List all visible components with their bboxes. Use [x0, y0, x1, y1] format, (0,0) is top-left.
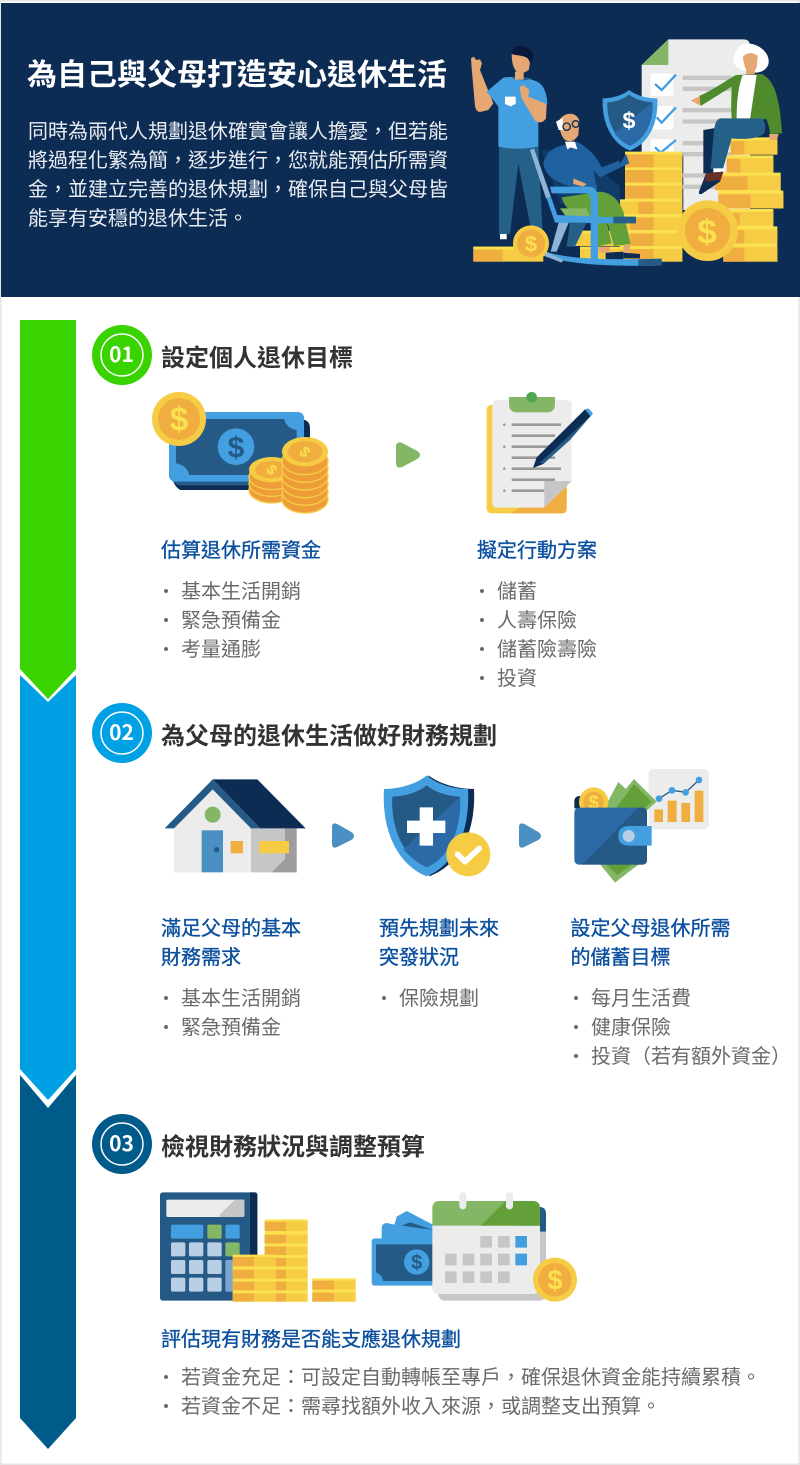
icon: calculator and coins: [160, 1192, 356, 1302]
panel: header: [1, 3, 800, 297]
woman sitting: [691, 43, 782, 194]
column: estimate funds: 基本生活開銷: [181, 575, 301, 604]
column: emergencies: [379, 912, 499, 1011]
block: evaluation: 評估現有財務是否能支應退休規劃: [161, 1323, 461, 1352]
heading: step 3: 檢視財務狀況與調整預算: [161, 1127, 425, 1162]
arrow bar: step 3: [20, 1075, 76, 1449]
column: basic needs: 財務需求: [161, 941, 241, 970]
column: basic needs: 滿足父母的基本: [161, 912, 301, 941]
icon: money and coins: $: [170, 402, 189, 439]
column: basic needs: 基本生活開銷: [181, 982, 301, 1011]
gold coins: $: [697, 213, 717, 251]
column: basic needs: [161, 912, 301, 1040]
shield with dollar: $: [623, 108, 636, 134]
number badge 01: 01: [109, 339, 134, 369]
column: savings goal: 設定父母退休所需: [570, 912, 730, 941]
number badge 02: 02: [109, 717, 134, 747]
number badge 02: [92, 703, 152, 763]
shield with dollar: [603, 90, 657, 151]
number badge 03: [92, 1114, 152, 1174]
arrow bar: step 1: [20, 320, 76, 699]
man standing: [471, 46, 547, 246]
block: evaluation: 若資金充足：可設定自動轉帳至專戶，確保退休資金能持續累積。: [181, 1361, 761, 1390]
column: savings goal: 的儲蓄目標: [570, 941, 670, 970]
heading: step 2: 為父母的退休生活做好財務規劃: [161, 716, 497, 751]
icon: cash, calendar and coin: [372, 1192, 577, 1302]
rocking chair and elderly man: [530, 114, 662, 266]
number badge 01: [92, 325, 152, 385]
icon: money and coins: $: [228, 432, 245, 465]
arrow: [397, 443, 419, 467]
column: savings goal: 投資（若有額外資金）: [591, 1040, 791, 1069]
title: 為自己與父母打造安心退休生活: [27, 50, 447, 94]
illustration: family with coins: [471, 39, 783, 266]
column: estimate funds: 緊急預備金: [181, 604, 281, 633]
document: [642, 39, 750, 210]
column: action plan: 儲蓄險壽險: [497, 633, 597, 662]
intro text: 同時為兩代人規劃退休確實會讓人擔憂，但若能: [28, 115, 448, 144]
icon: cash, calendar and coin: $: [547, 1264, 563, 1295]
column: action plan: 擬定行動方案: [477, 534, 597, 563]
number badge 03: 03: [109, 1128, 134, 1158]
column: estimate funds: 估算退休所需資金: [161, 534, 321, 563]
column: estimate funds: [161, 534, 321, 662]
column: action plan: 投資: [497, 662, 537, 691]
block: evaluation: 若資金不足：需尋找額外收入來源，或調整支出預算。: [181, 1390, 661, 1419]
arrow bar: step 2: [20, 675, 76, 1100]
intro text: 金，並建立完善的退休規劃，確保自己與父母皆: [28, 173, 448, 202]
column: emergencies: 預先規劃未來: [379, 912, 499, 941]
arrow: [520, 824, 540, 847]
icon: money and coins: $: [262, 462, 280, 479]
column: savings goal: 健康保險: [591, 1011, 671, 1040]
column: action plan: 儲蓄: [497, 575, 537, 604]
step 3: [92, 1114, 761, 1419]
column: savings goal: 每月生活費: [591, 982, 691, 1011]
icon: shield with cross: [384, 775, 490, 876]
intro text: [28, 115, 448, 231]
step 1: [92, 325, 597, 691]
intro text: 將過程化繁為簡，逐步進行，您就能預估所需資: [28, 144, 448, 173]
arrow: [333, 824, 353, 847]
intro text: 能享有安穩的退休生活。: [28, 202, 248, 231]
coin stacks: [473, 137, 783, 262]
column: action plan: 人壽保險: [497, 604, 577, 633]
icon: wallet and chart: $: [588, 792, 599, 813]
gold coins: $: [525, 231, 537, 256]
column: savings goal: [570, 912, 791, 1069]
gold coins: [513, 200, 738, 261]
step 2: [92, 703, 791, 1069]
icon: money and coins: $: [295, 443, 314, 461]
icon: money and coins: [152, 392, 328, 513]
icon: house: [165, 779, 306, 872]
block: evaluation: [161, 1323, 761, 1419]
icon: clipboard and pen: [487, 392, 593, 513]
column: action plan: [477, 534, 597, 691]
icon: cash, calendar and coin: $: [411, 1252, 422, 1274]
column: basic needs: 緊急預備金: [181, 1011, 281, 1040]
column: emergencies: 保險規劃: [399, 982, 479, 1011]
column: estimate funds: 考量通膨: [181, 633, 261, 662]
icon: wallet and chart: [574, 769, 709, 883]
heading: step 1: 設定個人退休目標: [161, 338, 353, 373]
column: emergencies: 突發狀況: [379, 941, 459, 970]
